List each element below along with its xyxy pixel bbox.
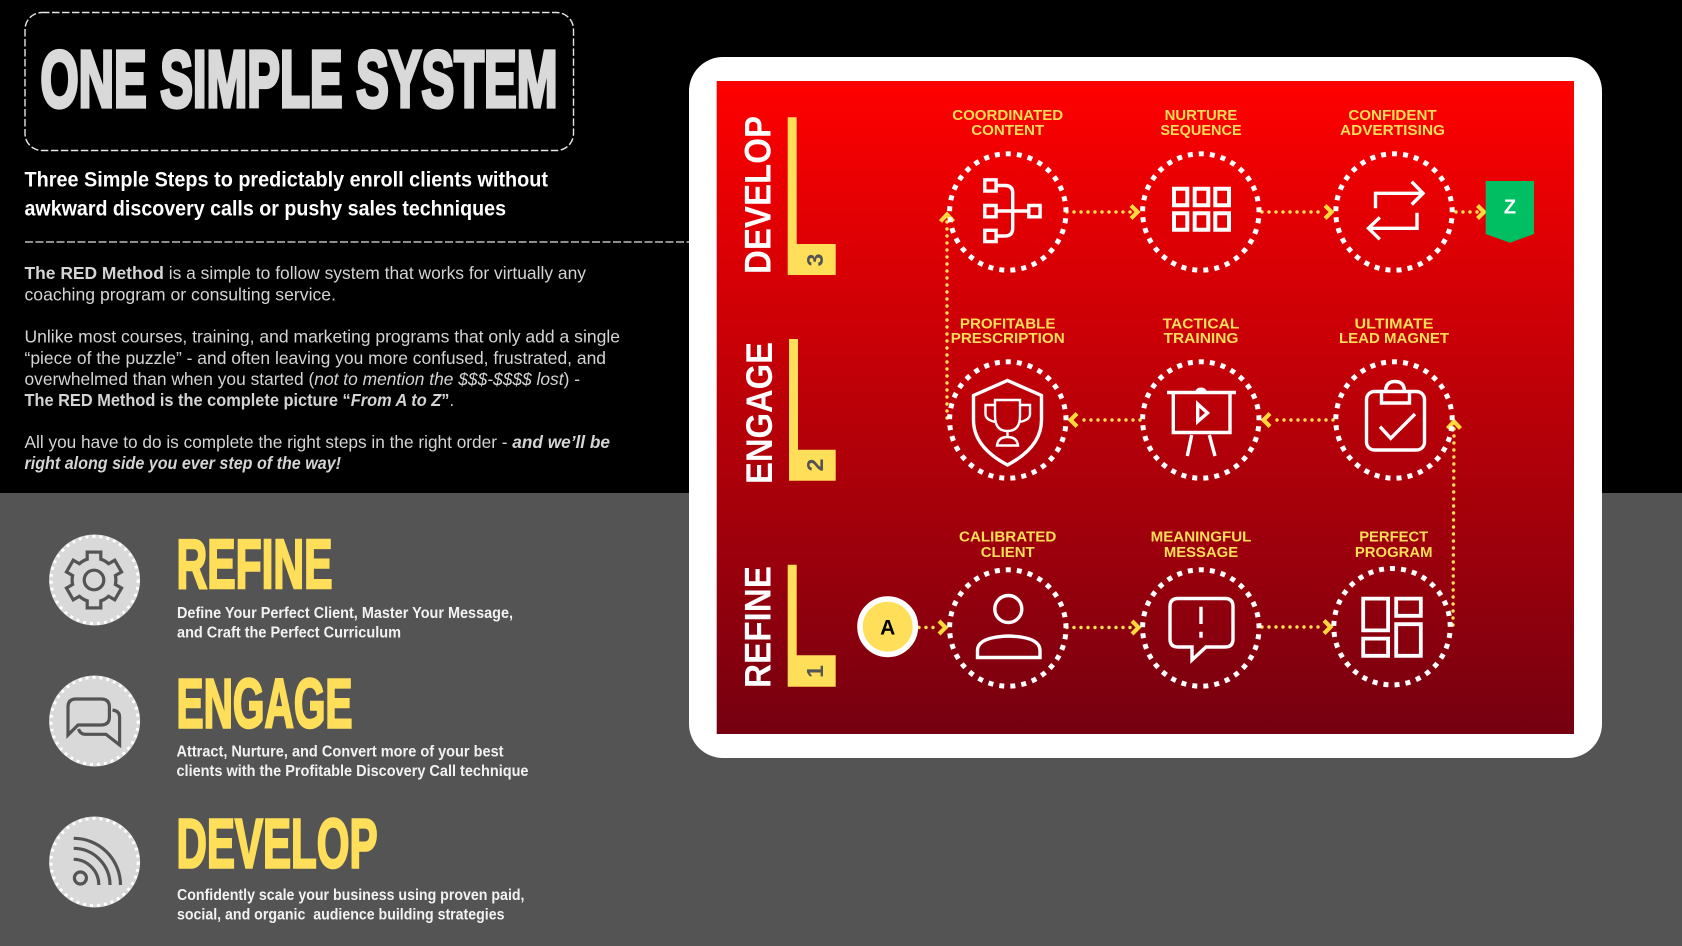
badge: Z endpoint: Z [1504, 196, 1516, 218]
refine heading and description: REFINE [176, 525, 332, 603]
background: black upper area [0, 0, 1682, 493]
engage heading and description: clients with the Profitable Discovery Call technique [176, 763, 529, 780]
background: gray lower area [0, 493, 1682, 946]
step: calibrated client [948, 529, 1068, 688]
panel: red method diagram [689, 57, 1602, 758]
body text: All you have to do is complete the right steps in the right order - and we’ll be [24, 432, 610, 452]
body text: right along side you ever step of the way! [24, 453, 341, 473]
step: tactical training: TACTICAL [1163, 315, 1239, 332]
step: profitable prescription: PRESCRIPTION [951, 330, 1065, 347]
refine heading and description: Define Your Perfect Client, Master Your Message, [177, 605, 513, 622]
red gradient panel [717, 81, 1574, 734]
engage heading and description: ENGAGE [176, 665, 352, 743]
step: ultimate lead magnet: LEAD MAGNET [1339, 330, 1450, 347]
step: tactical training: TRAINING [1164, 330, 1238, 347]
step: profitable prescription [948, 315, 1068, 480]
step: profitable prescription: PROFITABLE [960, 315, 1056, 332]
develop stage label: 3 [802, 254, 828, 266]
body text: coaching program or consulting service. [24, 284, 336, 304]
refine stage label: 1 [802, 665, 828, 678]
step: nurture sequence: NURTURE [1165, 107, 1237, 124]
subtitle: Three Simple Steps to predictably enroll clients without [24, 168, 548, 192]
develop heading and description [176, 805, 524, 923]
step: ultimate lead magnet [1334, 315, 1454, 480]
badge: Z endpoint [1486, 181, 1534, 243]
icon: rss signal [49, 816, 140, 908]
step: tactical training [1141, 315, 1261, 480]
body text [24, 263, 620, 473]
refine stage label [738, 565, 836, 688]
icon: chat bubbles [49, 676, 140, 766]
develop heading and description: social, and organic audience building strategies [177, 906, 504, 923]
step: nurture sequence [1141, 107, 1261, 272]
step: coordinated content: CONTENT [971, 122, 1045, 139]
refine stage label: REFINE [738, 566, 778, 688]
step: confident advertising: CONFIDENT [1348, 107, 1437, 124]
step: perfect program: PROGRAM [1355, 544, 1433, 561]
body text: The RED Method is the complete picture “From A to Z”. [24, 390, 454, 410]
start marker A: A [880, 616, 895, 640]
step: confident advertising [1334, 107, 1454, 272]
engage stage label: ENGAGE [739, 342, 780, 484]
step: confident advertising: ADVERTISING [1340, 122, 1445, 139]
step: coordinated content: COORDINATED [952, 107, 1063, 124]
step: ultimate lead magnet: ULTIMATE [1354, 315, 1434, 332]
start marker A [860, 599, 915, 654]
engage heading and description: Attract, Nurture, and Convert more of your best [176, 744, 504, 761]
title box [25, 12, 574, 150]
step: meaningful message: MEANINGFUL [1151, 529, 1251, 546]
refine heading and description: and Craft the Perfect Curriculum [177, 624, 401, 641]
body text: Unlike most courses, training, and marketing programs that only add a single [24, 326, 620, 346]
develop stage label: DEVELOP [738, 116, 778, 274]
title box: ONE SIMPLE SYSTEM [40, 35, 558, 124]
body text: The RED Method is a simple to follow system that works for virtually any [24, 263, 586, 283]
step: calibrated client: CALIBRATED [959, 529, 1056, 546]
develop heading and description: DEVELOP [176, 805, 378, 883]
subtitle [24, 168, 548, 220]
step: meaningful message: MESSAGE [1164, 544, 1238, 561]
connector arrows [919, 206, 1484, 634]
develop heading and description: Confidently scale your business using proven paid, [177, 887, 524, 904]
step: meaningful message [1141, 529, 1261, 688]
step: perfect program [1332, 529, 1452, 687]
step: coordinated content [948, 107, 1068, 272]
engage stage label: 2 [802, 459, 828, 471]
body text: “piece of the puzzle” - and often leaving you more confused, frustrated, and [24, 348, 606, 368]
white frame [689, 57, 1602, 758]
body text: overwhelmed than when you started (not to mention the $$$-$$$$ lost) - [24, 369, 580, 389]
refine heading and description [176, 525, 513, 641]
develop stage label [738, 116, 836, 275]
subtitle: awkward discovery calls or pushy sales techniques [24, 198, 506, 220]
step: calibrated client: CLIENT [981, 544, 1035, 561]
step: perfect program: PERFECT [1359, 529, 1429, 546]
engage heading and description [176, 665, 529, 780]
icon: gear [49, 534, 140, 626]
engage stage label [739, 339, 836, 484]
step: nurture sequence: SEQUENCE [1160, 122, 1242, 139]
